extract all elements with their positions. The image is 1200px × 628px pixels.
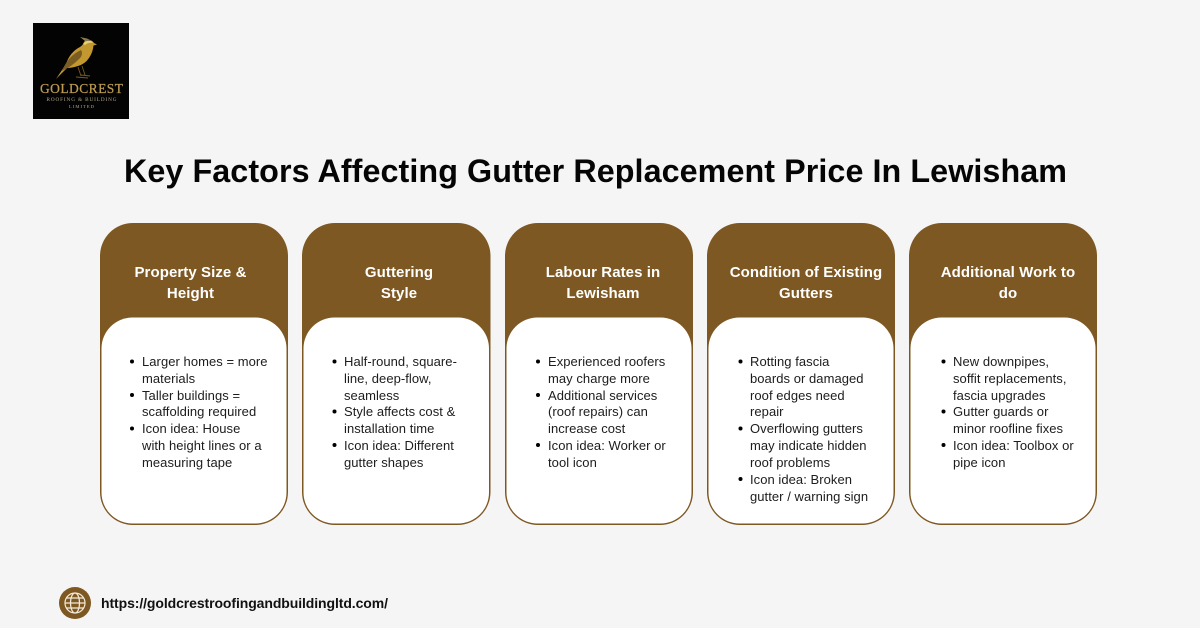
heading: property size and height: Height	[167, 285, 214, 302]
list: additional work bullets: soffit replacements,	[953, 371, 1066, 386]
list: property size bullets: Larger homes = more	[142, 354, 268, 369]
list: labour rates bullets	[536, 354, 666, 470]
logo: Goldcrest Roofing & Building	[33, 23, 129, 119]
list: property size bullets	[130, 354, 268, 470]
list: condition bullets: boards or damaged	[750, 371, 864, 386]
icon: globe	[59, 587, 91, 619]
icon: goldcrest bird	[56, 37, 97, 79]
list: condition bullets: repair	[750, 404, 784, 419]
list: additional work bullets: minor roofline fixes	[953, 421, 1064, 436]
logo subtitle: ROOFING & BUILDING	[46, 97, 117, 103]
list: guttering style bullets	[332, 354, 457, 470]
list: guttering style bullets: installation time	[344, 421, 434, 436]
list: property size bullets: measuring tape	[142, 455, 232, 470]
list: property size bullets: scaffolding required	[142, 404, 256, 419]
heading: labour rates: Labour Rates in	[546, 264, 660, 281]
list: additional work bullets: Gutter guards or	[953, 404, 1049, 419]
list: additional work bullets: New downpipes,	[953, 354, 1049, 369]
list: condition bullets: may indicate hidden	[750, 438, 867, 453]
list: labour rates bullets: may charge more	[548, 371, 650, 386]
list: condition bullets: gutter / warning sign	[750, 489, 868, 504]
panel: condition of existing gutters	[707, 223, 895, 525]
list: property size bullets: Icon idea: House	[142, 421, 240, 436]
heading: labour rates: Lewisham	[566, 285, 640, 302]
heading: additional work: Additional Work to	[941, 264, 1075, 281]
heading: property size and height: Property Size &	[134, 264, 247, 281]
list: condition bullets: roof problems	[750, 455, 831, 470]
list: guttering style bullets: line, deep-flow,	[344, 371, 432, 386]
logo wordmark: GOLDCREST	[40, 81, 124, 96]
panel: property size and height	[100, 223, 288, 525]
list: property size bullets: materials	[142, 371, 196, 386]
list: property size bullets: Taller buildings =	[142, 388, 240, 403]
list: additional work bullets: fascia upgrades	[953, 388, 1046, 403]
list: guttering style bullets: gutter shapes	[344, 455, 424, 470]
list: labour rates bullets: Icon idea: Worker or	[548, 438, 666, 453]
list: guttering style bullets: Style affects cost &	[344, 404, 456, 419]
panel: guttering style	[302, 223, 490, 525]
heading: guttering style: Style	[381, 285, 417, 302]
list: additional work bullets	[942, 354, 1074, 470]
list: additional work bullets: Icon idea: Toolbox or	[953, 438, 1074, 453]
list: labour rates bullets: Additional services	[548, 388, 658, 403]
list: labour rates bullets: (roof repairs) can	[548, 404, 648, 419]
list: labour rates bullets: increase cost	[548, 421, 626, 436]
list: condition bullets: Rotting fascia	[750, 354, 830, 369]
heading: guttering style: Guttering	[365, 264, 433, 281]
title: Key Factors Affecting Gutter Replacement Price In Lewisham	[124, 153, 1067, 189]
list: labour rates bullets: Experienced roofers	[548, 354, 666, 369]
list: property size bullets: with height lines or a	[141, 438, 262, 453]
list: labour rates bullets: tool icon	[548, 455, 597, 470]
heading: condition of existing gutters: Gutters	[779, 285, 833, 302]
list: condition bullets: Icon idea: Broken	[750, 472, 852, 487]
panel: additional work to do	[909, 223, 1097, 525]
list: guttering style bullets: seamless	[344, 388, 400, 403]
website url: https://goldcrestroofingandbuildingltd.com/	[101, 595, 388, 611]
list: additional work bullets: pipe icon	[953, 455, 1006, 470]
list: condition bullets	[738, 354, 868, 504]
heading: additional work: do	[999, 285, 1017, 302]
logo subtitle second line: LIMITED	[69, 104, 95, 109]
heading: condition of existing gutters: Condition of Existing	[730, 264, 882, 281]
panel: labour rates in Lewisham	[505, 223, 693, 525]
list: guttering style bullets: Icon idea: Different	[344, 438, 454, 453]
list: guttering style bullets: Half-round, square-	[344, 354, 457, 369]
list: condition bullets: Overflowing gutters	[750, 421, 863, 436]
list: condition bullets: roof edges need	[750, 388, 845, 403]
